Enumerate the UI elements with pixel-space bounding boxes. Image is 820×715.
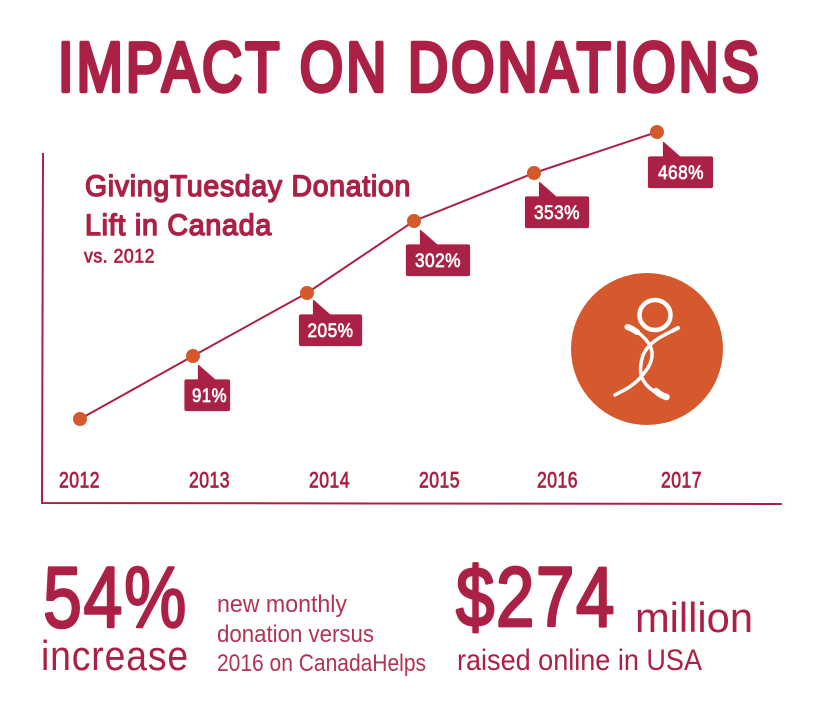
chart heading: GivingTuesday Donation: [85, 170, 411, 203]
callout: 468%: 468%: [658, 162, 704, 184]
stat: $274 million: million: [635, 594, 753, 641]
x-axis year labels: 2017: [661, 468, 702, 492]
chart axes: [42, 153, 782, 504]
callout: 205%: [300, 300, 362, 346]
stat: $274 million: raised online in USA: [457, 644, 702, 677]
stat: $274 million: [456, 550, 753, 677]
x-axis year labels: 2015: [419, 468, 460, 492]
text: monthly donation note: new monthly: [217, 591, 347, 618]
data line: [80, 132, 657, 419]
stat: 54% increase: [41, 550, 189, 679]
icon: GivingTuesday figure: [571, 273, 723, 425]
chart heading: Lift in Canada: [85, 209, 272, 242]
text: monthly donation note: 2016 on CanadaHelps: [217, 650, 426, 677]
data points: [73, 125, 664, 426]
x-axis year labels: 2014: [309, 468, 350, 492]
text: monthly donation note: donation versus: [217, 621, 374, 648]
x-axis year labels: 2013: [189, 468, 230, 492]
callout: 302%: 302%: [415, 250, 461, 272]
callout: 91%: 91%: [192, 385, 227, 407]
callout: 205%: 205%: [308, 320, 354, 342]
stat: $274 million: $274: [456, 550, 616, 644]
text: monthly donation note: [217, 591, 426, 677]
callout: 91%: [185, 366, 230, 410]
chart heading: vs. 2012: [84, 246, 155, 268]
line chart: [42, 125, 782, 504]
x-axis year labels: 2012: [59, 468, 100, 492]
callout: 468%: [648, 142, 712, 188]
stat: 54% increase: 54%: [43, 550, 188, 646]
x-axis year labels: [59, 468, 702, 492]
chart heading: [84, 170, 411, 268]
stat: 54% increase: increase: [41, 632, 189, 679]
x-axis year labels: 2016: [537, 468, 578, 492]
callout: 353%: 353%: [534, 202, 580, 224]
callout: 353%: [526, 182, 588, 228]
callout: 302%: [406, 230, 470, 276]
